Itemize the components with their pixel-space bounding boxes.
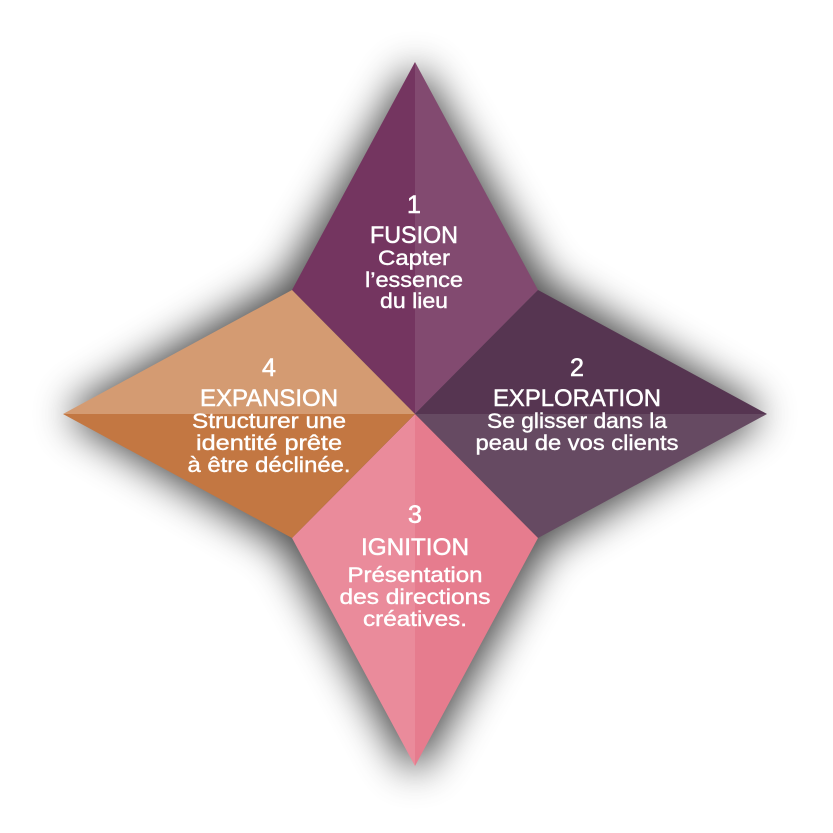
- step number 1: 1: [407, 191, 421, 219]
- text: expansion description: Structurer une: [192, 410, 346, 433]
- text: ignition description: créatives.: [363, 608, 467, 631]
- facet: fusion right: [415, 62, 538, 414]
- text: fusion description: Capter: [378, 247, 450, 270]
- facet: expansion bottom: [63, 414, 415, 538]
- facet: expansion top: [63, 290, 415, 414]
- text: expansion description: [188, 410, 350, 477]
- text: fusion description: l’essence: [365, 269, 463, 292]
- text: ignition description: Présentation: [348, 564, 482, 587]
- text: ignition description: des directions: [340, 586, 490, 609]
- text: expansion description: à être déclinée.: [188, 454, 350, 477]
- text: fusion description: [365, 247, 463, 313]
- text: exploration description: peau de vos clients: [476, 432, 678, 455]
- heading: expansion: EXPANSION: [200, 385, 338, 412]
- panel: 3 ignition: [292, 414, 538, 766]
- panel: 1 fusion: [292, 62, 538, 414]
- text: fusion description: du lieu: [380, 290, 448, 313]
- panel: 4 expansion: [63, 290, 415, 538]
- text: expansion description: identité prête: [196, 432, 342, 455]
- text: exploration description: [476, 410, 678, 455]
- facet: ignition right: [415, 414, 538, 766]
- star drop shadow: [83, 82, 747, 758]
- facet: exploration top: [415, 290, 767, 414]
- step number 4: 4: [262, 354, 276, 382]
- text: ignition description: [340, 564, 490, 631]
- facet: ignition left: [292, 414, 415, 766]
- facet: exploration bottom: [415, 414, 767, 538]
- step number 2: 2: [570, 354, 584, 382]
- facet: fusion left: [292, 62, 415, 414]
- panel: 2 exploration: [415, 290, 767, 538]
- heading: ignition: IGNITION: [361, 534, 469, 561]
- text: exploration description: Se glisser dans la: [487, 410, 667, 433]
- heading: exploration: EXPLORATION: [493, 385, 661, 412]
- heading: fusion: FUSION: [370, 222, 458, 249]
- step number 3: 3: [408, 501, 422, 529]
